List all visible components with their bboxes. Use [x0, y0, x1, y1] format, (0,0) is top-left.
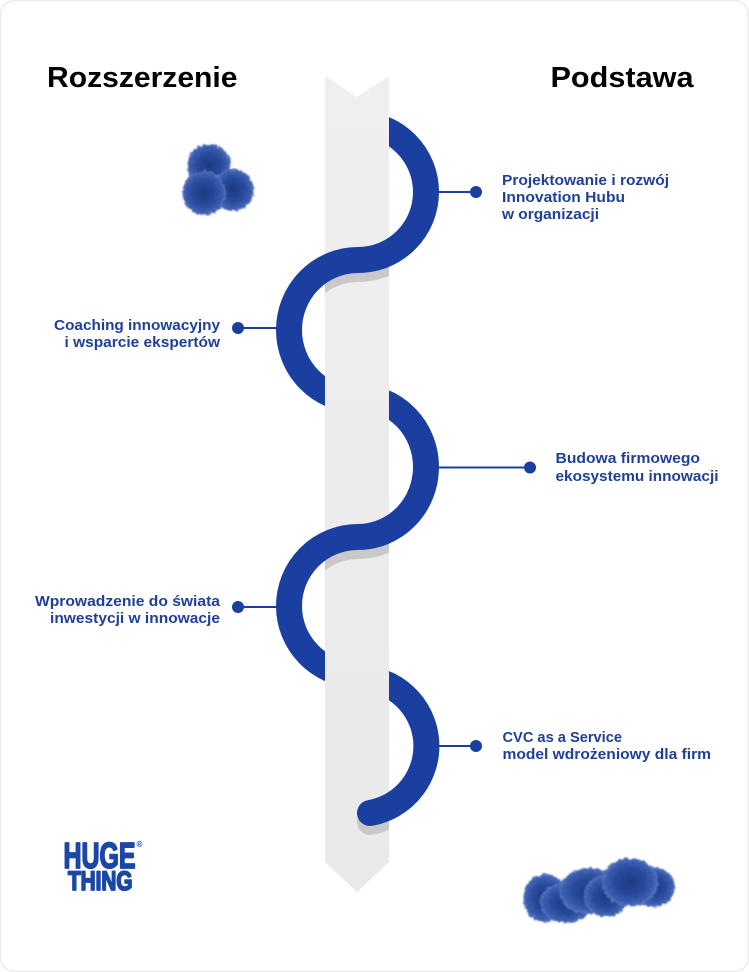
curve segment 1 [289, 124, 426, 400]
logo: Huge Thing: THING [68, 866, 132, 896]
winding blue path [289, 124, 426, 813]
curve shadows on band [325, 267, 389, 835]
label: ecosystem: ekosystemu innowacji [556, 469, 718, 485]
label: CVC: CVC as a Service [502, 730, 622, 746]
logo: Huge Thing: ® [136, 840, 142, 849]
label: Coaching: i wsparcie ekspertów [64, 335, 221, 351]
label: ecosystem [556, 451, 718, 485]
label: Innovation Hub [501, 173, 669, 223]
connector: CVC [438, 740, 482, 752]
heading: Rozszerzenie: Rozszerzenie [47, 62, 238, 94]
icon: fur wave cluster [523, 858, 675, 923]
connector: investment [232, 601, 278, 613]
label: CVC: model wdrożeniowy dla firm [502, 747, 711, 763]
label: investment: Wprowadzenie do świata [35, 594, 221, 610]
central vertical arrow band [325, 76, 389, 892]
connector: Innovation Hub [438, 186, 482, 198]
label: Innovation Hub: w organizacji [501, 207, 599, 223]
logo: Huge Thing: HUGE [64, 835, 136, 876]
connector: ecosystem [438, 462, 536, 474]
label: ecosystem: Budowa firmowego [556, 451, 700, 467]
label: investment: inwestycji w innowacje [50, 611, 220, 627]
connector: Coaching [232, 322, 278, 334]
label: CVC [502, 730, 711, 763]
label: Innovation Hub: Innovation Hubu [502, 190, 625, 206]
icon: fur balls cluster [182, 144, 254, 215]
label: investment [35, 594, 221, 627]
curve segment 3 [358, 678, 426, 813]
label: Coaching [54, 318, 221, 351]
label: Innovation Hub: Projektowanie i rozwój [502, 173, 669, 189]
heading: Podstawa: Podstawa [550, 62, 694, 94]
curve segment 2 [289, 397, 426, 675]
logo: Huge Thing [64, 835, 142, 896]
label: Coaching: Coaching innowacyjny [54, 318, 220, 334]
